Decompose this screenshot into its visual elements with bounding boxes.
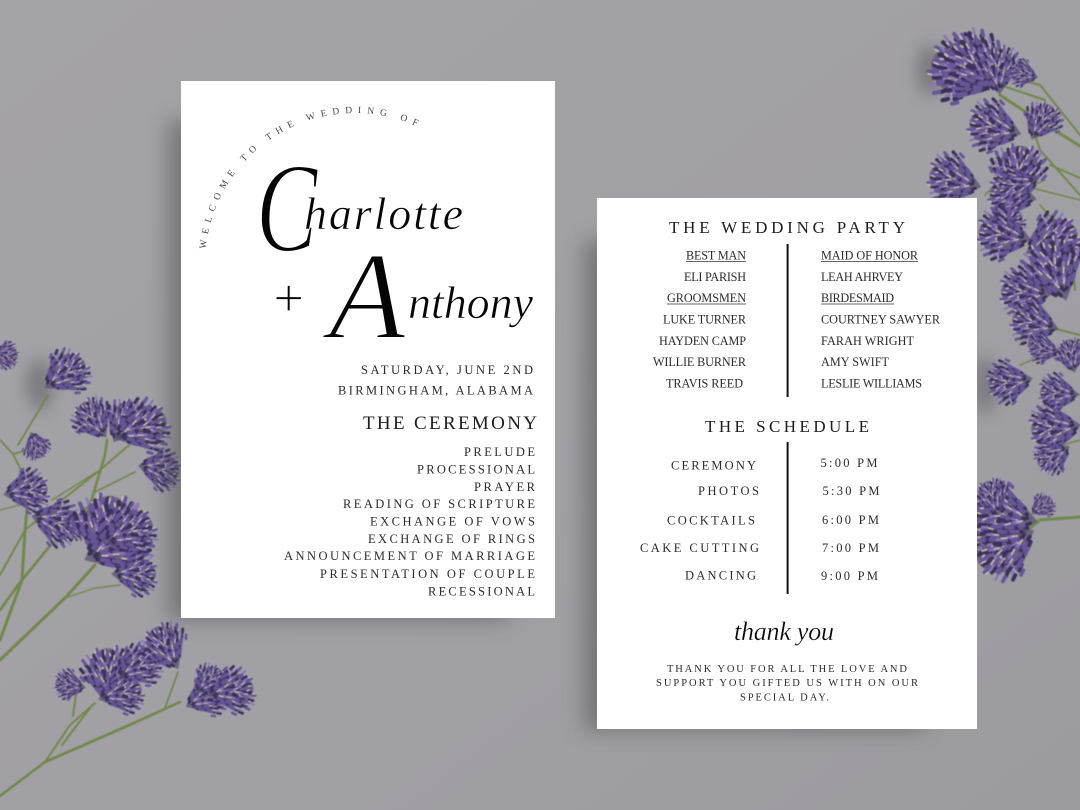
- bride side list: AMY SWIFT: [821, 355, 890, 369]
- schedule events: DANCING: [685, 568, 756, 582]
- thank you message: SPECIAL DAY.: [740, 692, 829, 704]
- schedule divider: [787, 442, 789, 594]
- ceremony list: PRELUDE: [464, 445, 535, 459]
- schedule times: 9:00 PM: [821, 569, 878, 583]
- script name: Anthony: [322, 228, 534, 366]
- stems: right side: [985, 78, 1080, 540]
- bride side list: BIRDESMAID: [821, 291, 894, 305]
- schedule times: [820, 456, 880, 583]
- date and place: SATURDAY, JUNE 2ND: [361, 363, 533, 377]
- groom side list: TRAVIS REED: [666, 376, 743, 390]
- date and place: BIRMINGHAM, ALABAMA: [338, 384, 533, 398]
- schedule times: 6:00 PM: [822, 513, 879, 527]
- bride side list: FARAH WRIGHT: [821, 334, 915, 348]
- groom side list: LUKE TURNER: [663, 312, 747, 326]
- florets: right side: [916, 16, 1080, 595]
- sprig: lower-left main branch: [0, 337, 260, 796]
- thank you message: THANK YOU FOR ALL THE LOVE AND: [667, 664, 907, 675]
- card background: [597, 198, 977, 729]
- ceremony list: ANNOUNCEMENT OF MARRIAGE: [284, 549, 535, 563]
- ceremony list: PROCESSIONAL: [417, 462, 535, 476]
- arc heading: WELCOME TO THE WEDDING OF: [200, 106, 419, 248]
- groom side list: WILLIE BURNER: [653, 355, 747, 369]
- script name: Charlotte: [256, 139, 463, 280]
- panel: ceremony card: [181, 81, 555, 618]
- schedule events: COCKTAILS: [667, 514, 755, 528]
- script name: Anthony: nthony: [408, 277, 534, 328]
- bride side list: LESLIE WILLIAMS: [821, 376, 922, 390]
- script plus sign: +: [270, 268, 306, 328]
- groom side list: HAYDEN CAMP: [659, 334, 746, 348]
- groom side list: [653, 248, 747, 390]
- ceremony list: READING OF SCRIPTURE: [343, 497, 535, 511]
- florets: bottom sprig: [51, 612, 260, 728]
- script name: Anthony: A: [322, 228, 406, 366]
- stems: bottom sprig: [0, 672, 180, 796]
- thank you message: SUPPORT YOU GIFTED US WITH ON OUR: [656, 678, 918, 689]
- bride side list: [821, 248, 941, 390]
- ceremony list: EXCHANGE OF RINGS: [368, 532, 535, 546]
- heading: the schedule: THE SCHEDULE: [705, 417, 869, 436]
- groom side list: BEST MAN: [686, 248, 746, 262]
- schedule times: 5:00 PM: [820, 456, 878, 470]
- schedule events: CEREMONY: [671, 458, 756, 472]
- script: thank you: thank you: [734, 617, 834, 646]
- card background: [181, 81, 555, 618]
- stems: left main: [0, 395, 135, 660]
- florets: left sprig: [0, 337, 186, 599]
- bride side list: MAID OF HONOR: [821, 248, 919, 262]
- schedule times: 5:30 PM: [822, 484, 880, 498]
- bride side list: LEAH AHRVEY: [821, 270, 903, 284]
- thank you message: [656, 664, 918, 704]
- sprig: right side: [916, 16, 1080, 595]
- panel: party and schedule card: [597, 198, 977, 729]
- shadows of the cards: [168, 120, 924, 730]
- script name: Charlotte: C: [256, 139, 319, 280]
- heading: the wedding party: THE WEDDING PARTY: [669, 218, 905, 237]
- flower shadows: [26, 44, 997, 413]
- ceremony list: [284, 445, 536, 598]
- groom side list: GROOMSMEN: [667, 291, 746, 305]
- ceremony list: RECESSIONAL: [428, 584, 535, 598]
- schedule events: PHOTOS: [698, 484, 759, 498]
- ceremony list: PRAYER: [474, 480, 536, 494]
- party divider: [787, 244, 789, 397]
- schedule events: CAKE CUTTING: [640, 541, 759, 555]
- ceremony list: EXCHANGE OF VOWS: [370, 514, 535, 528]
- bride side list: COURTNEY SAWYER: [821, 312, 941, 326]
- ceremony list: PRESENTATION OF COUPLE: [320, 567, 535, 581]
- heading: the ceremony: THE CEREMONY: [363, 413, 537, 434]
- schedule times: 7:00 PM: [822, 541, 879, 555]
- script name: Charlotte: harlotte: [304, 188, 463, 239]
- groom side list: ELI PARISH: [684, 270, 746, 284]
- schedule events: [640, 458, 759, 582]
- date and place: [338, 363, 533, 398]
